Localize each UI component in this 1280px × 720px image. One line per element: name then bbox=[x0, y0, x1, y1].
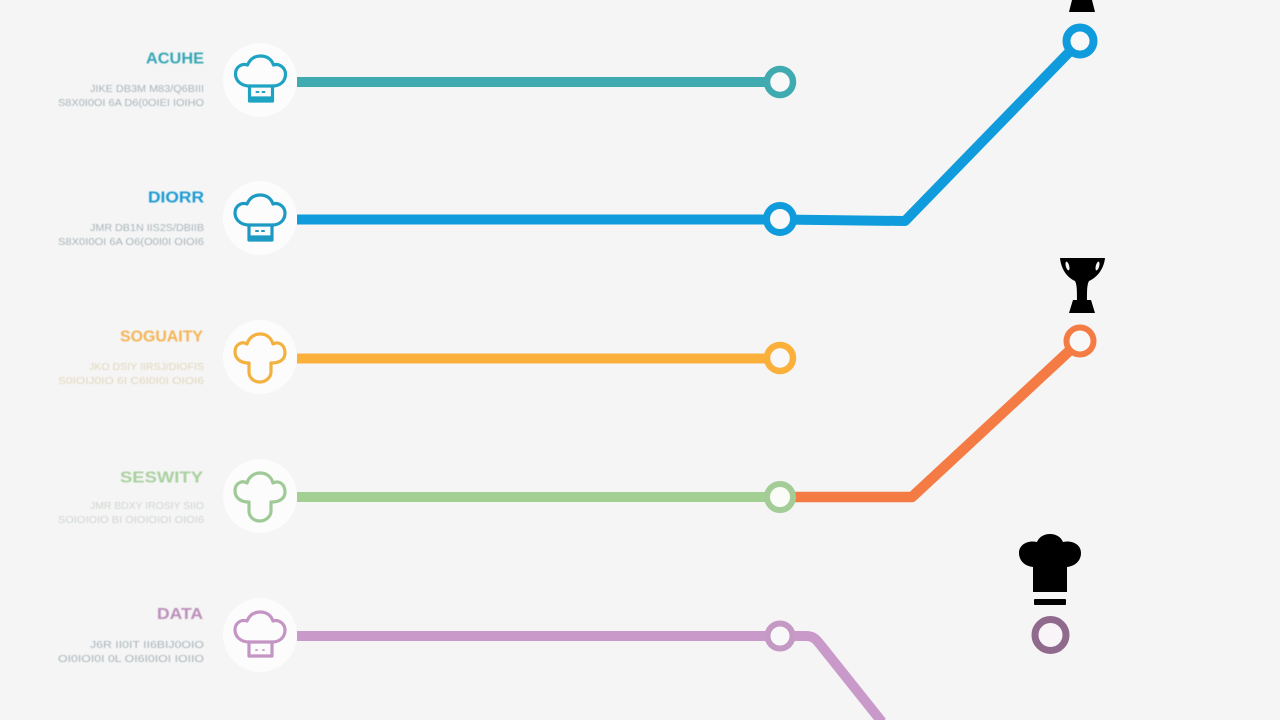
node: orange top bbox=[1066, 328, 1094, 354]
icon: trophy base cropped at top bbox=[1069, 0, 1095, 12]
icon: clover amber bbox=[223, 320, 297, 394]
node: purple bbox=[768, 624, 792, 648]
row 4: green and orange bbox=[58, 258, 1105, 533]
node: green bbox=[767, 484, 793, 510]
description: sesuity: SOIOIOIO BI OIOIOIOI OIOI6 bbox=[58, 514, 204, 526]
heading: data: DATA bbox=[157, 606, 203, 623]
icon: chef hat purple bbox=[223, 598, 297, 672]
icon: chef hat teal-blue bbox=[223, 43, 297, 117]
icon: trophy bbox=[1060, 258, 1105, 313]
line: teal bbox=[297, 77, 780, 87]
heading: diorr: DIORR bbox=[148, 190, 204, 206]
node: blue mid bbox=[766, 206, 794, 232]
description: data: OI0IOI0I 0L OI6I0IOI IOIIO bbox=[58, 653, 204, 665]
node: mauve bbox=[1035, 620, 1066, 650]
heading: soguaity: SOGUAITY bbox=[120, 328, 203, 346]
description: sesuity: JMR BDXY IROSIY SIIO bbox=[90, 500, 204, 512]
line: orange rising bbox=[780, 341, 1080, 497]
node: teal bbox=[767, 69, 793, 95]
line: green bbox=[297, 492, 780, 502]
description: soguaity: JKO DSIY IIRSJ/DIOFIS bbox=[89, 361, 204, 373]
icon: black chef hat bbox=[1019, 534, 1081, 605]
description: soguaity: S0IOIJ0IO 6I C6I0I0I OIOI6 bbox=[58, 375, 204, 387]
row 2: blue bbox=[58, 0, 1095, 255]
description: diorr: JMR DB1N IIS2S/DBIIB bbox=[90, 222, 204, 234]
heading: acuhe: ACUHE bbox=[146, 50, 204, 68]
icon: chef hat blue bbox=[223, 181, 297, 255]
row 5: purple bbox=[58, 534, 1081, 720]
description: data: J6R II0IT II6BIJ0OIO bbox=[90, 639, 204, 651]
description: acuhe: JIKE DB3M M83/Q6BIII bbox=[90, 83, 204, 95]
row 3: amber bbox=[58, 320, 793, 394]
description: diorr: S8X0I0OI 6A O6(O0I0I OIOI6 bbox=[58, 236, 204, 248]
line: blue rising to top bbox=[297, 41, 1080, 221]
node: blue top bbox=[1066, 28, 1094, 54]
icon: clover green bbox=[223, 459, 297, 533]
row 1: teal bbox=[58, 43, 793, 117]
heading: sesuity: SESWITY bbox=[120, 470, 203, 486]
line: purple falling bbox=[297, 636, 882, 720]
line: amber bbox=[297, 354, 780, 364]
description: acuhe: S8X0I0OI 6A D6(0OIEI IOIHO bbox=[58, 97, 204, 109]
node: amber bbox=[767, 345, 793, 371]
